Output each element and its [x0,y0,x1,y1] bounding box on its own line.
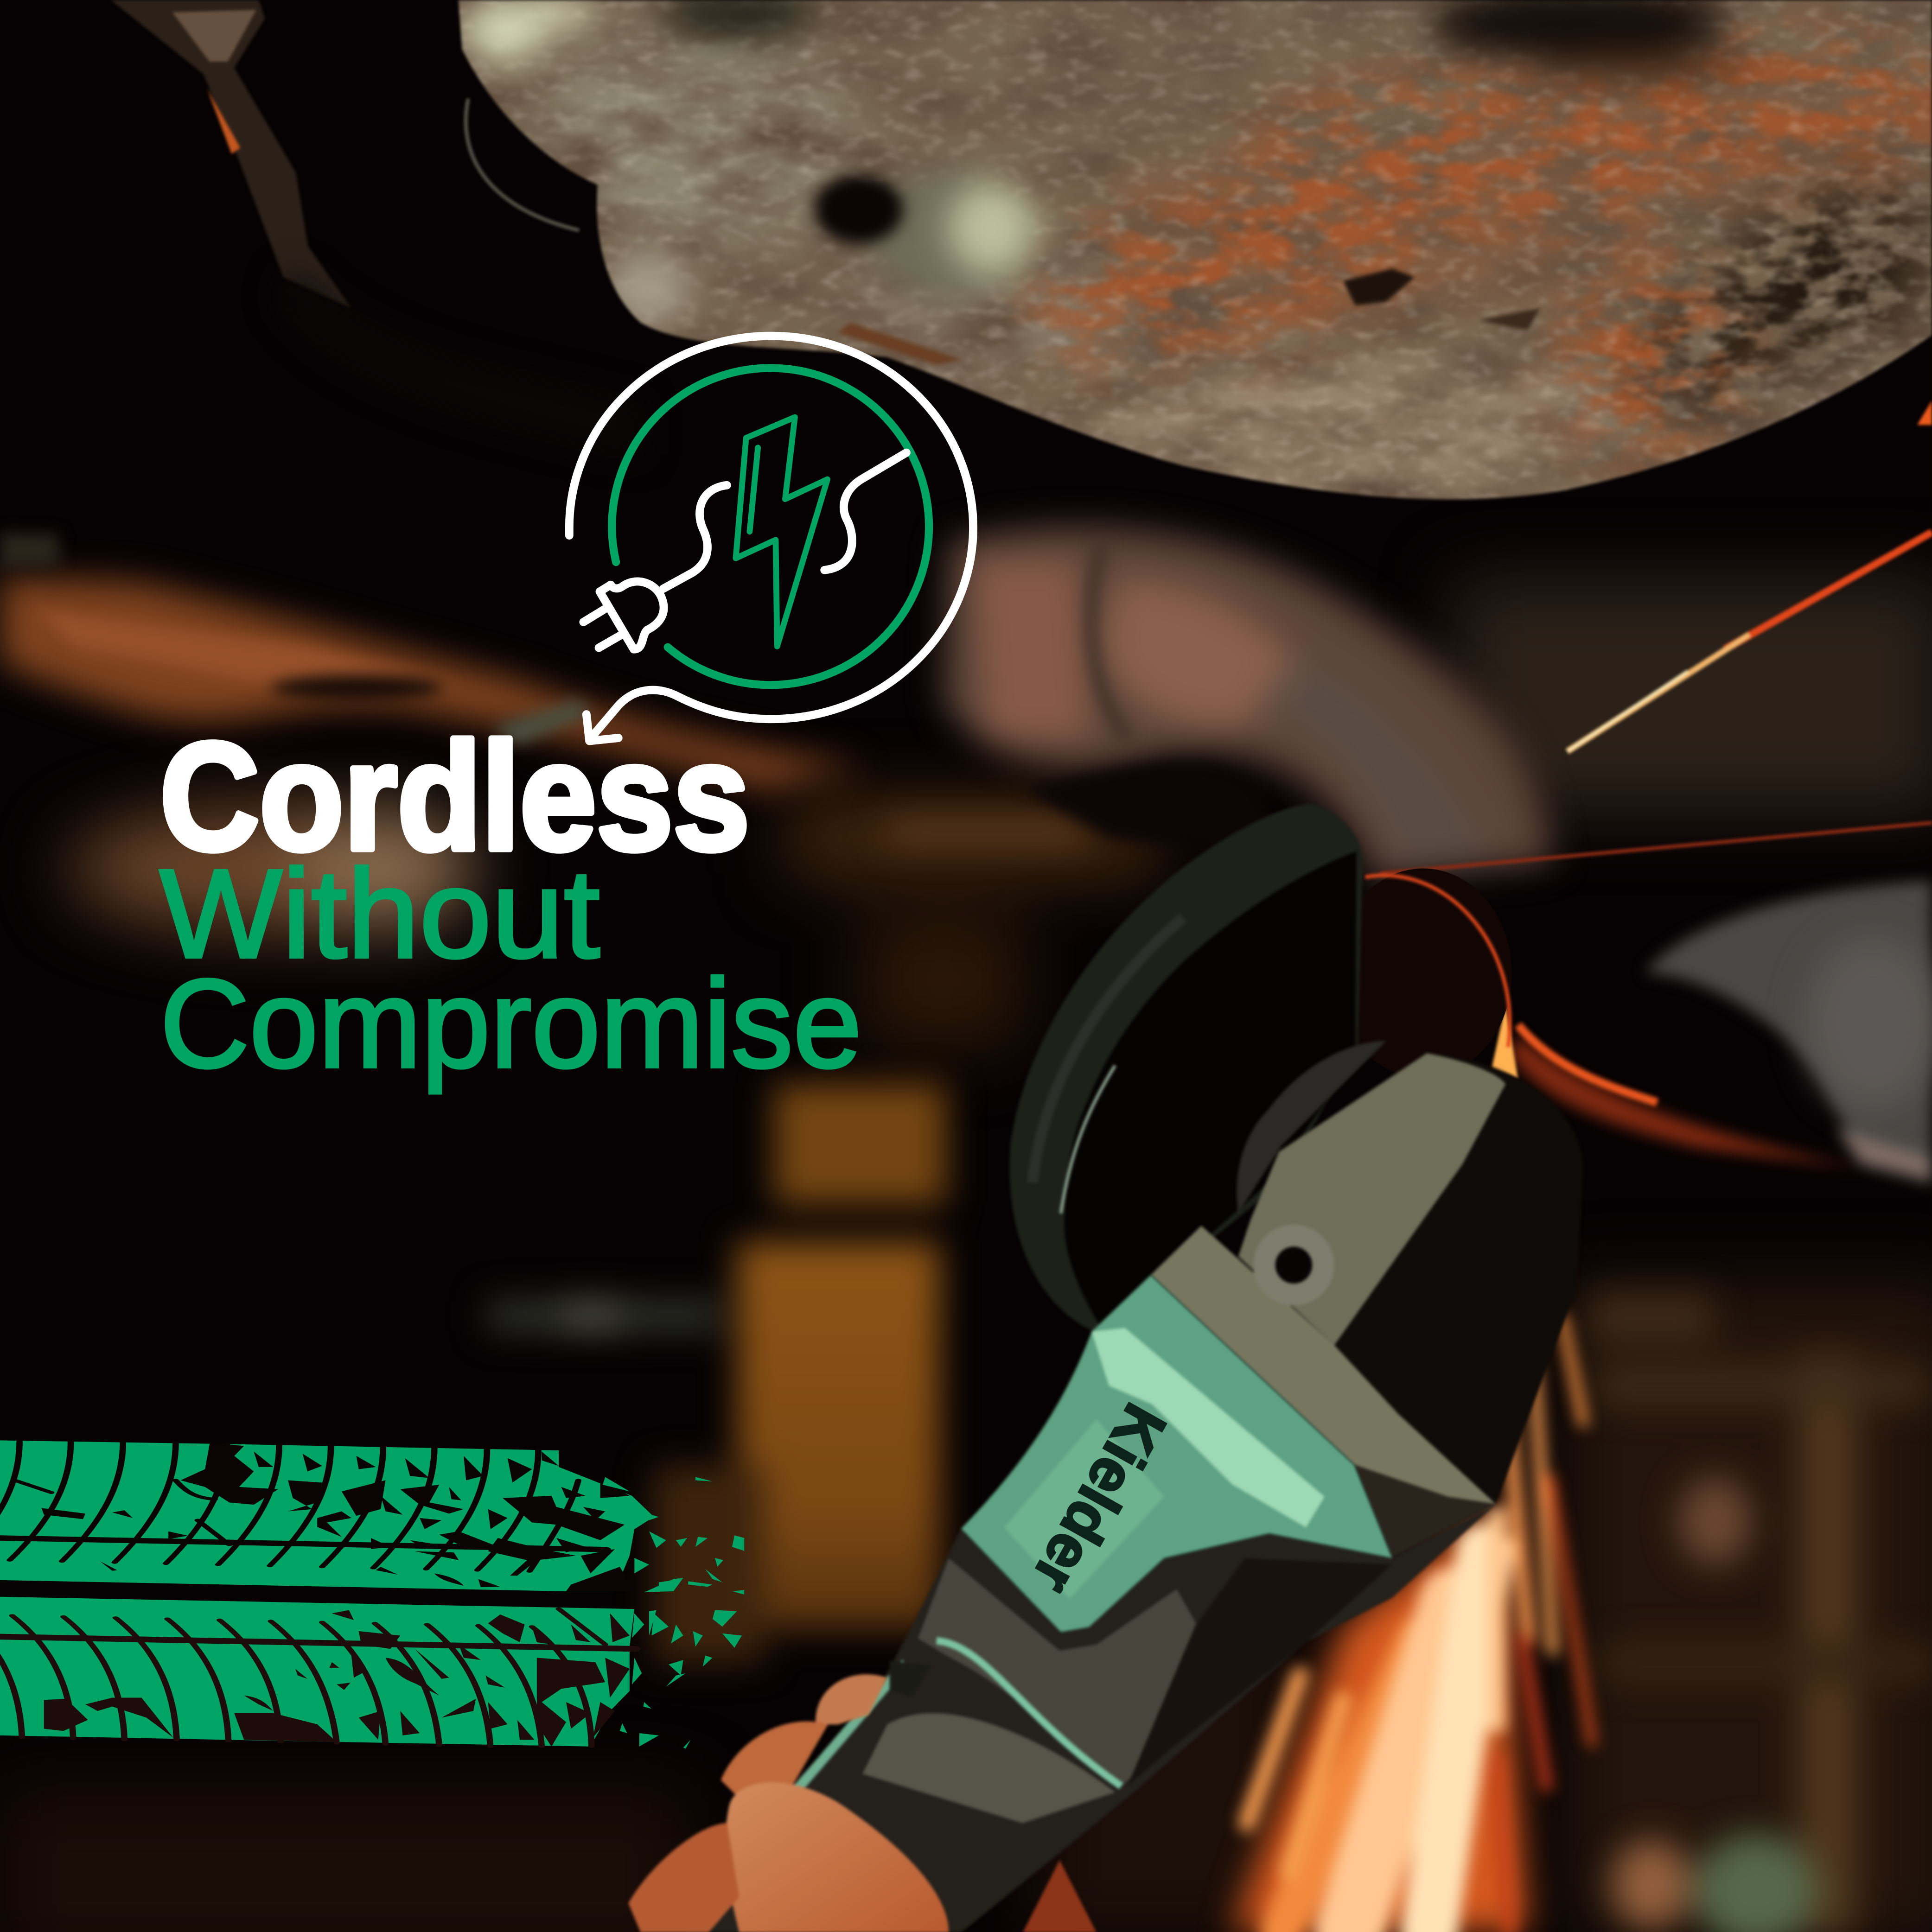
heading line: Without: Without [159,843,600,984]
falling sparks [1232,1318,1592,1932]
dim bracket shadow [277,271,641,456]
lower tread grooves [0,1609,634,1747]
sparks thrown right [1380,400,1932,873]
electric plug [583,581,664,649]
Kielder brand text on grinder: Kielder [1019,1393,1179,1605]
heading line: Cordless: Cordless [160,711,750,882]
cord right of bolt [824,453,906,570]
grinder guard [1009,803,1363,1333]
dark shadow below pipe [1023,762,1294,862]
upper tread wear marks [41,1443,634,1591]
lower tread wear marks [44,1610,630,1747]
cord left of bolt [663,485,727,589]
rusty plate [444,0,1932,517]
cutting disc [1334,869,1512,1078]
pipe weld seam [1091,542,1128,739]
upper tread grooves [0,1442,605,1571]
inner green ring [612,368,929,685]
outer white speech bubble ring with arrow [569,336,973,741]
glowing cut edge [1491,1004,1657,1102]
pipe clamp at plate edge [466,99,579,230]
grinder handle [684,1504,1496,1932]
heading line: Compromise: Compromise [160,953,862,1095]
exhaust pipe [943,527,1552,881]
lower tread band [0,1597,634,1747]
worn fragments at tread end [603,1477,744,1749]
rivet dimple [866,170,1044,298]
rust flakes [838,268,1540,365]
blurred orange blocks [487,819,1932,1932]
hand gripping grinder [628,1674,1097,1932]
lightning bolt [736,417,828,646]
rust strip at left [0,577,862,788]
icon: plug, cord and lightning bolt in speech-bubble rings [569,336,973,741]
grinder green body [961,1275,1392,1632]
tyre track graphic [0,1440,744,1749]
grinder gear head [1151,1041,1583,1558]
curved bracket at top left [111,0,351,308]
exhaust shaded highlight [1805,936,1932,1109]
blurred workshop background [0,579,1932,1932]
rivet dark hollow [815,175,903,244]
heading [159,711,862,1095]
right exhaust section [1509,881,1932,1182]
upper tread band [0,1440,654,1591]
